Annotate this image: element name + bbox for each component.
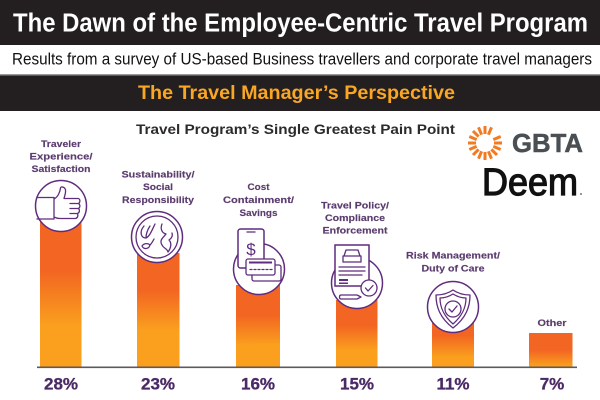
label: cost containment: Containment/ (223, 194, 294, 205)
axis (37, 366, 577, 368)
bar: 23% (137, 253, 180, 367)
label: traveler experience: Experience/ (30, 150, 93, 162)
label: travel policy (321, 200, 389, 236)
percentage: 16%: 16% (241, 374, 275, 394)
bar: 7% (529, 333, 572, 367)
logo: GBTA (468, 126, 583, 160)
label: sustainability: Responsibility (122, 194, 195, 205)
label: travel policy: Travel Policy/ (321, 200, 389, 210)
percentage: 15%: 15% (340, 374, 374, 394)
percentage: 23%: 23% (141, 374, 175, 394)
percentage: 7%: 7% (540, 374, 564, 394)
icon: globe with leaf (132, 212, 182, 262)
logo: GBTA: GBTA (512, 130, 583, 158)
label: traveler experience: Satisfaction (32, 163, 91, 174)
label: other: Other (538, 317, 567, 328)
icon: GBTA sunburst (468, 126, 502, 160)
bar: 28% (40, 220, 82, 367)
icon: thumbs up (36, 180, 86, 232)
percentage: 28%: 28% (44, 374, 78, 394)
bar chart (37, 220, 577, 368)
section banner (0, 74, 600, 111)
icon: shield (428, 282, 478, 332)
label: risk management: Duty of Care (422, 262, 484, 274)
label: sustainability (122, 168, 195, 205)
bar: 15% (336, 300, 378, 367)
label: sustainability: Social (143, 181, 173, 192)
icon: phone and credit cards: $ (246, 240, 256, 259)
title banner (0, 0, 600, 45)
label: risk management (406, 250, 500, 274)
logo: Deem: Deem (482, 162, 578, 204)
label: cost containment: Savings (240, 207, 278, 218)
label: cost containment: Cost (248, 181, 270, 192)
bar: 16% (236, 285, 280, 367)
label: cost containment (223, 181, 294, 218)
icon: phone and credit cards (234, 229, 284, 294)
label: travel policy: Enforcement (322, 224, 388, 236)
chart title: Travel Program’s Single Greatest Pain Point (136, 122, 456, 137)
label: risk management: Risk Management/ (406, 250, 500, 260)
label: travel policy: Compliance (325, 212, 385, 223)
icon: policy document (332, 245, 382, 308)
label: traveler experience (30, 138, 93, 174)
percentage: 11%: 11% (436, 374, 470, 394)
label: traveler experience: Traveler (41, 138, 81, 149)
bar: 11% (432, 322, 474, 367)
label: sustainability: Sustainability/ (122, 168, 195, 180)
section banner: The Travel Manager’s Perspective (138, 83, 455, 104)
